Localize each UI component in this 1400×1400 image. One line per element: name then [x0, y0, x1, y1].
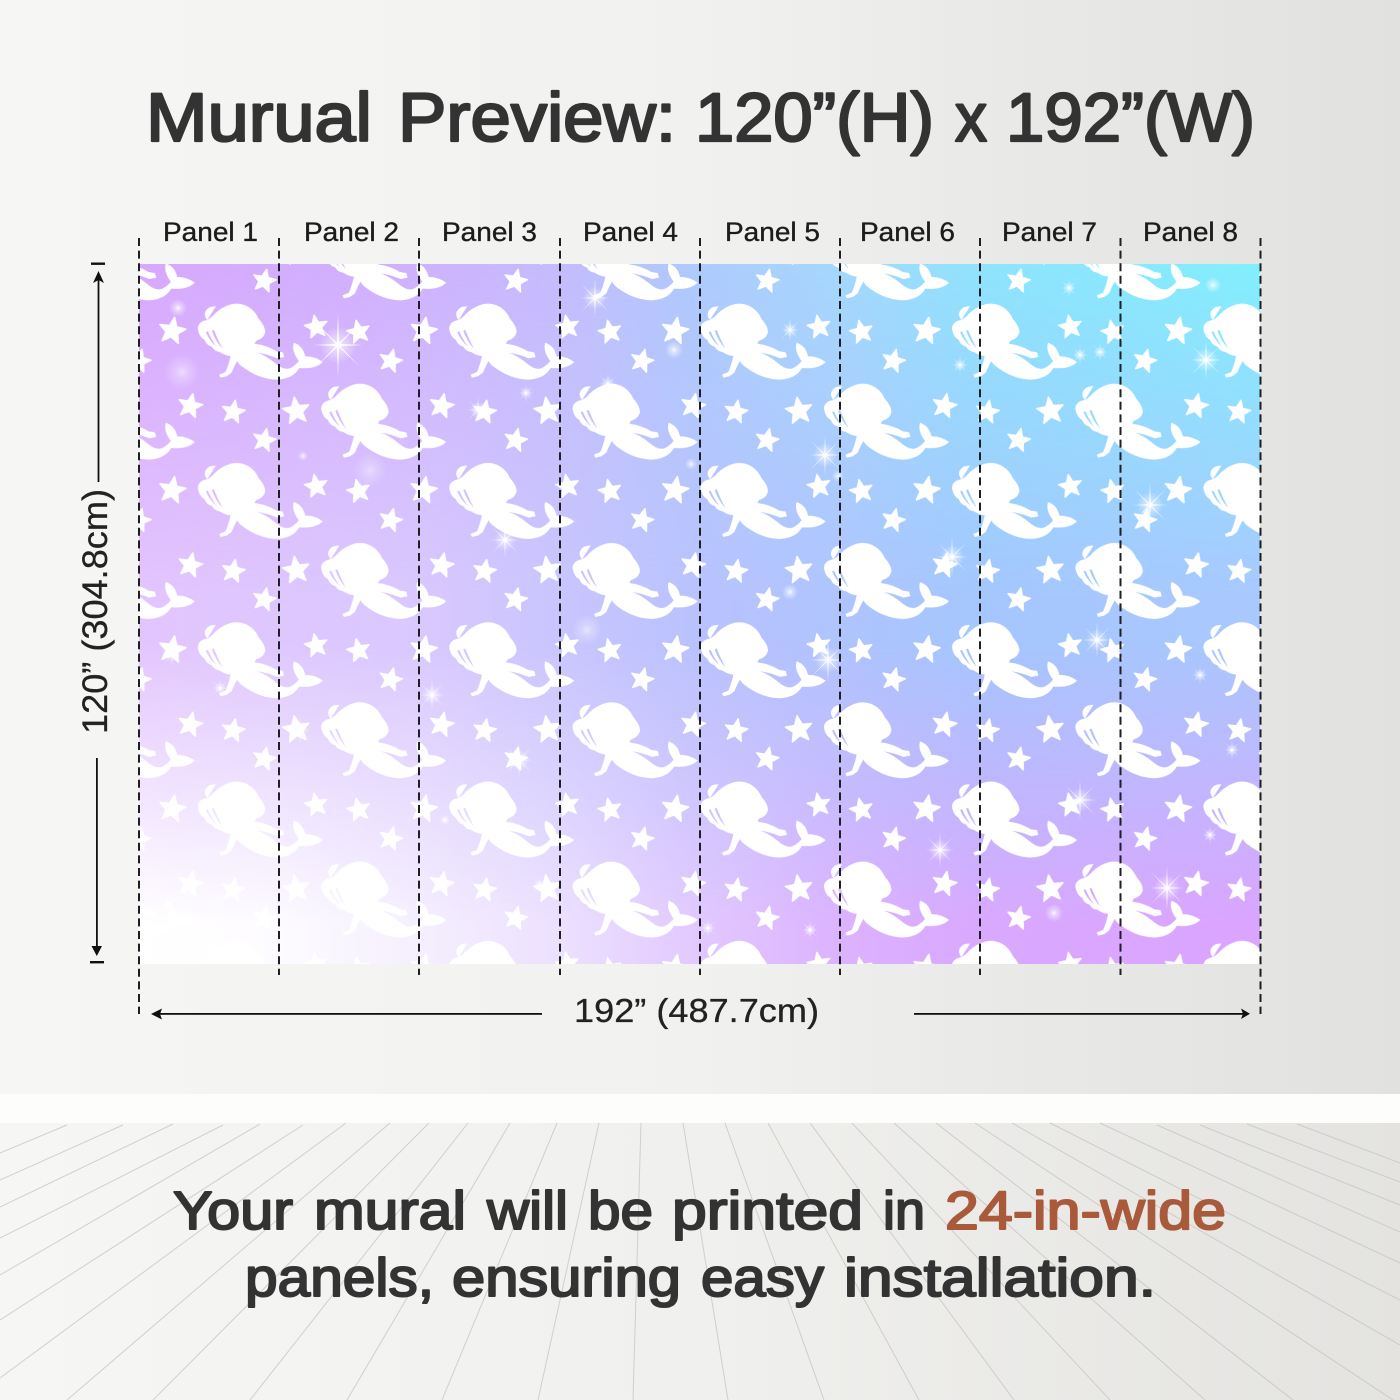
panel labels: Panel 5 — [725, 217, 820, 247]
title: x — [955, 79, 987, 156]
caption: will — [486, 1181, 568, 1241]
wall background — [0, 0, 1400, 1094]
caption: panels, — [245, 1248, 434, 1308]
title: Murual — [146, 79, 372, 156]
title: 120”(H) — [695, 79, 934, 156]
caption: printed — [672, 1181, 863, 1241]
height dimension: upper arrow — [91, 262, 105, 482]
caption: ensuring — [452, 1248, 681, 1308]
mermaid and star pattern — [139, 264, 1260, 964]
mural gradient background — [139, 264, 1260, 964]
panel labels: Panel 7 — [1002, 217, 1097, 247]
panel labels: Panel 1 — [163, 217, 258, 247]
panel labels: Panel 2 — [304, 217, 399, 247]
bokeh glows — [164, 277, 1221, 922]
wooden floor — [0, 1123, 1400, 1400]
width label: 192” (487.7cm) — [574, 992, 819, 1029]
caption: installation. — [844, 1248, 1156, 1308]
title: Preview: — [398, 79, 676, 156]
caption: 24-in-wide — [945, 1181, 1226, 1241]
caption: in — [883, 1181, 925, 1241]
title — [146, 79, 1255, 156]
panel divider dashed lines — [139, 238, 1260, 1014]
caption: Your — [173, 1181, 293, 1241]
caption: be — [588, 1181, 653, 1241]
height dimension: lower arrow — [90, 758, 104, 963]
title: 192”(W) — [1006, 79, 1255, 156]
panel labels: Panel 4 — [583, 217, 678, 247]
mural preview — [139, 264, 1260, 964]
panel labels: Panel 3 — [442, 217, 537, 247]
height label: 120” (304.8cm) — [76, 489, 115, 734]
width dimension: right arrow — [914, 1008, 1250, 1019]
baseboard — [0, 1094, 1400, 1123]
caption: easy — [701, 1248, 824, 1308]
panel labels: Panel 8 — [1143, 217, 1238, 247]
panel labels: Panel 6 — [860, 217, 955, 247]
caption: mural — [314, 1181, 466, 1241]
sparkles — [162, 278, 1240, 940]
panel labels — [163, 217, 1238, 247]
caption — [173, 1181, 1226, 1308]
width dimension: left arrow — [151, 1008, 542, 1020]
